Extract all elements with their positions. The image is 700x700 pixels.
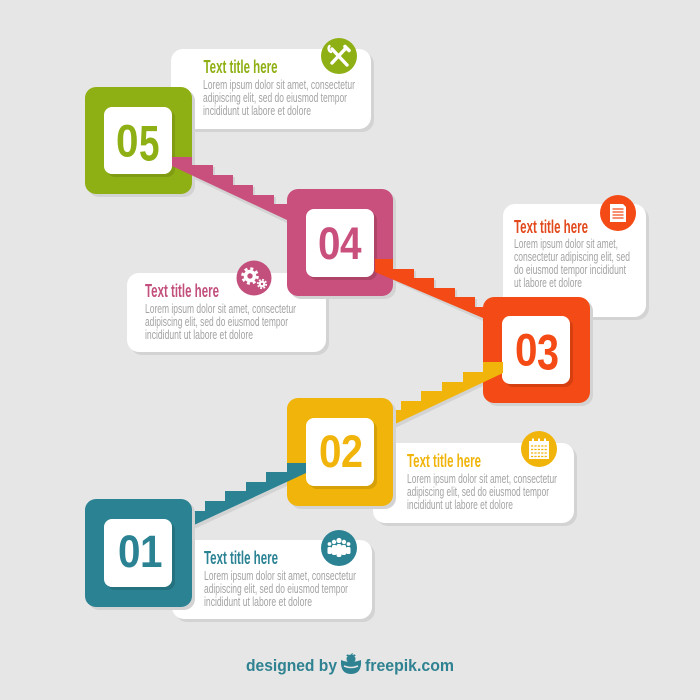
square 01: 1 [140,526,162,577]
square 03: 0 [515,324,538,376]
panel: text card 01: Lorem ipsum dolor sit amet, consectetur [204,569,356,583]
panel: text card 01: Text title here [204,548,278,568]
footer: freepik credit: freepik.com [365,656,454,675]
icon: people [321,530,357,566]
panel: text card 02: Lorem ipsum dolor sit amet, consectetur [407,472,557,486]
step 02 [287,362,577,526]
icon: document [600,195,636,231]
square 05: 0 [116,116,138,166]
panel: text card 02: Text title here [407,451,481,471]
panel: text card 04: adipiscing elit, sed do eiusmod tempor [145,315,288,329]
footer: freepik credit: designed by [246,656,337,675]
panel: text card 02: adipiscing elit, sed do eiusmod tempor [407,485,549,499]
square 03: 3 [537,324,559,380]
panel: text card 05: incididunt ut labore et dolore [203,104,311,118]
square 03 [483,297,593,406]
panel: text card 03 [503,204,649,320]
panel: text card 03: consectetur adipiscing elit, sed [514,250,630,264]
panel: text card 02 [373,443,577,526]
panel: text card 05: Text title here [204,57,278,77]
icon: freepik mascot [341,653,361,674]
step 04 [127,157,396,355]
panel: text card 05: Lorem ipsum dolor sit amet, consectetur [203,78,355,92]
step 05 [85,38,374,197]
panel: text card 05 [171,49,374,132]
footer: freepik credit [246,653,454,675]
square 04: 4 [340,218,362,269]
icon: calendar [521,431,557,467]
panel: text card 01: incididunt ut labore et dolore [204,595,312,609]
panel: text card 01: adipiscing elit, sed do eiusmod tempor [204,582,348,596]
stairs 03 to 02 [393,362,503,429]
panel: text card 03: ut labore et dolore [514,276,582,290]
square 02: 2 [341,426,363,477]
panel: text card 04 [127,273,329,355]
icon: gears [236,260,272,296]
panel: text card 04: Text title here [145,281,219,301]
square 01: 0 [118,526,140,577]
square 05: 5 [139,116,160,172]
square 02: 0 [319,426,342,477]
panel: text card 03: Lorem ipsum dolor sit amet, [514,237,618,251]
stairs 05 to 04 [172,157,287,223]
square 04 [287,189,396,299]
square 04: 0 [318,218,340,269]
step 01 [85,463,375,622]
square 02 [287,398,396,509]
stairs 02 to 01 [192,463,306,530]
panel: text card 03: Text title here [514,217,588,237]
panel: text card 01 [172,540,375,622]
panel: text card 02: incididunt ut labore et dolore [407,498,513,512]
icon: tools [321,38,357,74]
square 01 [85,499,195,610]
step 03 [375,195,649,406]
panel: text card 04: incididunt ut labore et dolore [145,328,253,342]
square 05 [85,87,195,197]
panel: text card 03: do eiusmod tempor incididunt [514,263,626,277]
panel: text card 04: Lorem ipsum dolor sit amet, consectetur [145,302,296,316]
panel: text card 05: adipiscing elit, sed do eiusmod tempor [203,91,347,105]
stairs 04 to 03 [375,259,483,321]
